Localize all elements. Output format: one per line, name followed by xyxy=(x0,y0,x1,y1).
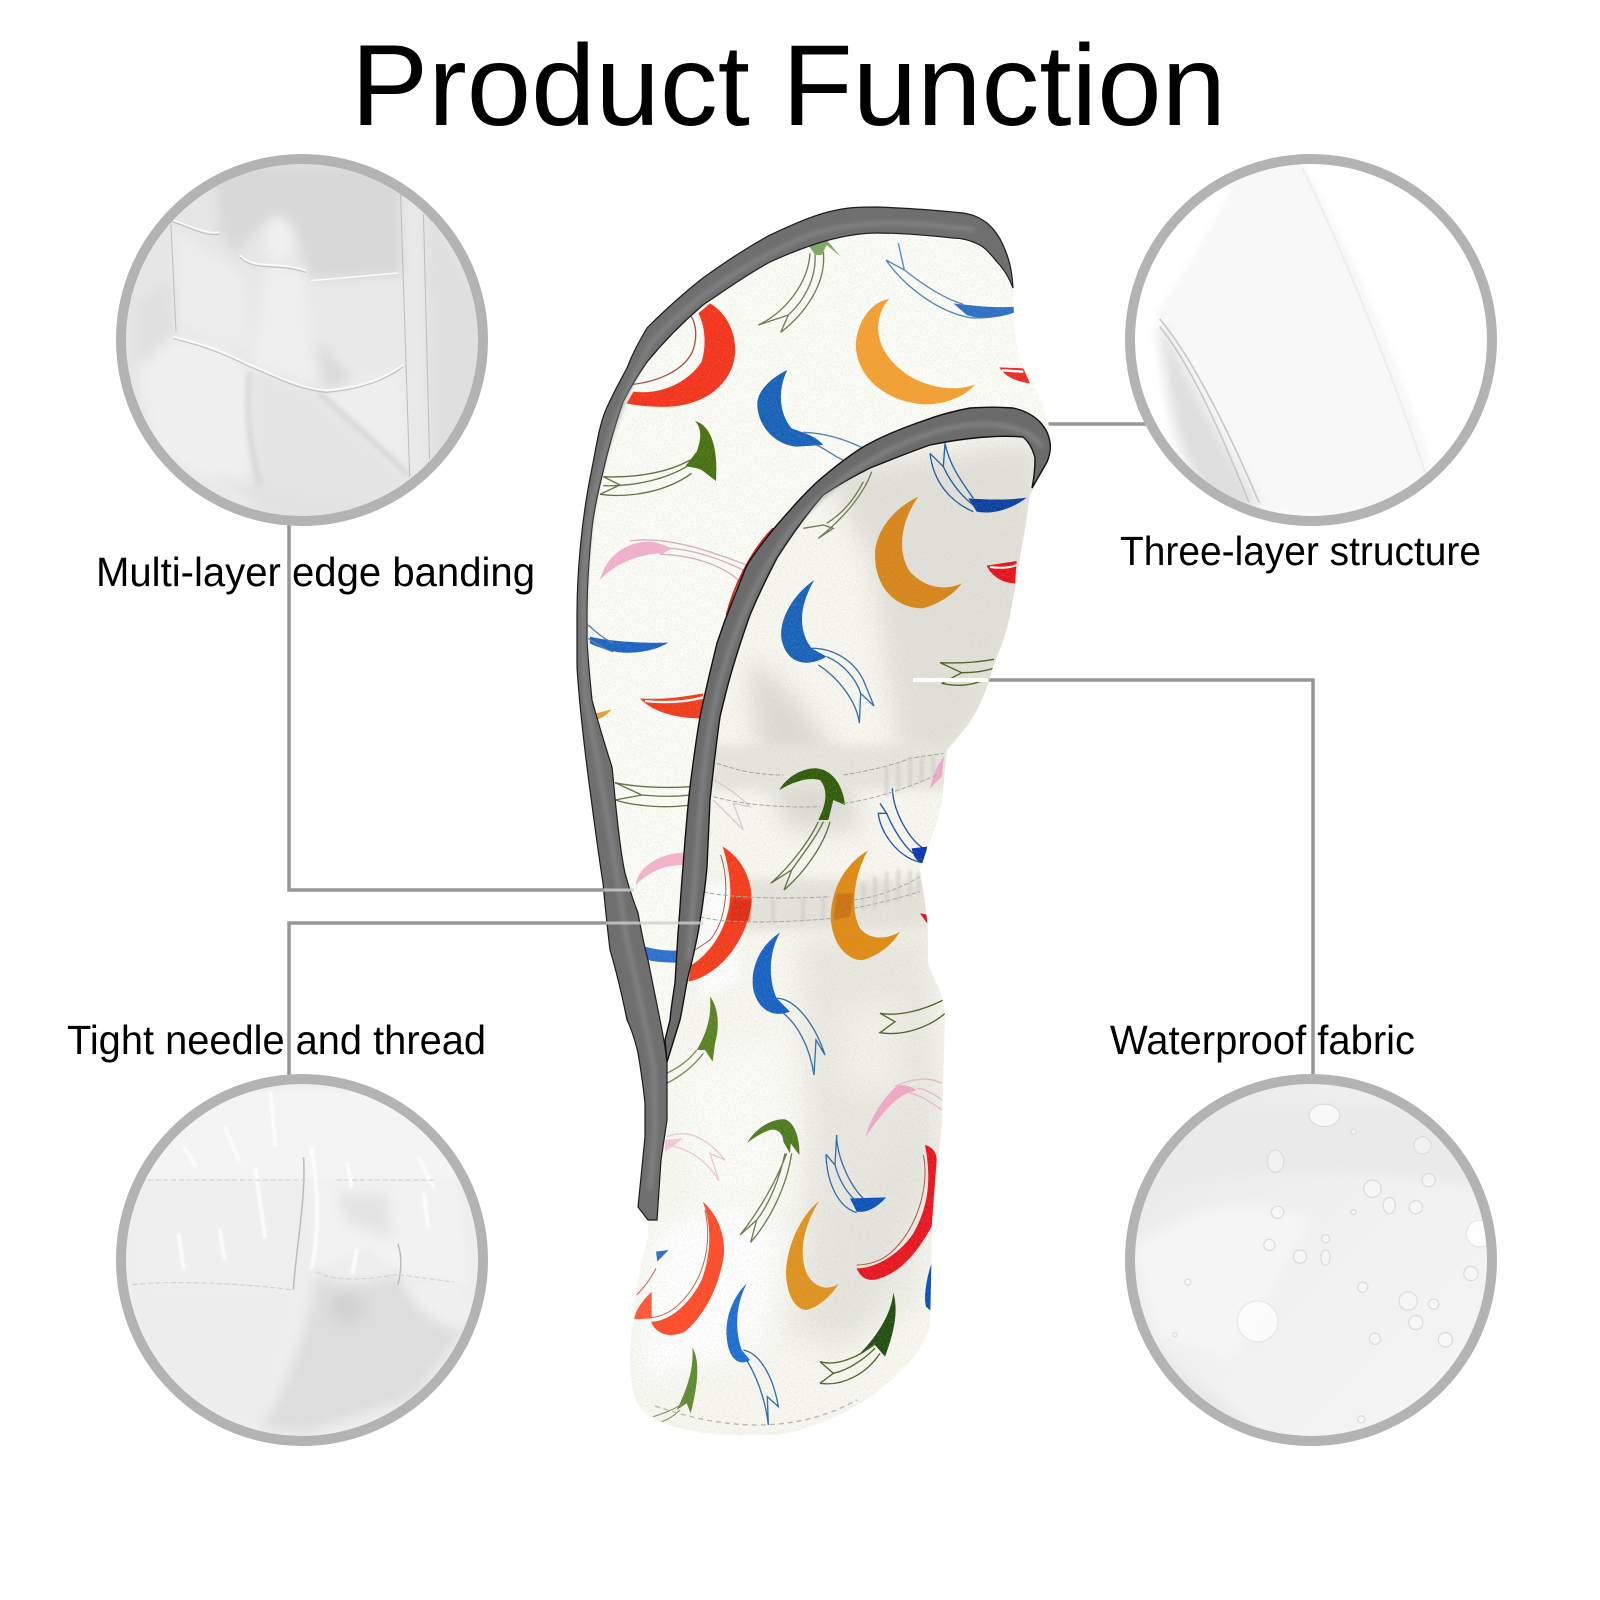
title: Product Function xyxy=(351,22,1226,150)
leather grain xyxy=(570,200,1060,1440)
rear panel print xyxy=(588,240,1030,963)
label: multi-layer edge banding: Multi-layer edge banding xyxy=(96,549,535,595)
circle ring xyxy=(121,1079,483,1441)
front panel base xyxy=(630,407,1050,1435)
rear panel base xyxy=(577,207,1050,1435)
white connector segment xyxy=(913,678,988,682)
water droplets xyxy=(1173,1104,1493,1423)
front binding highlight xyxy=(688,424,1042,960)
rear edge binding xyxy=(577,207,1013,1220)
circle: waterproof fabric detail xyxy=(1125,1075,1497,1447)
connector lines xyxy=(289,424,1313,1075)
product: golf club head cover xyxy=(570,200,1060,1440)
faint connector continuation xyxy=(603,890,703,923)
circle: multi-layer edge banding detail xyxy=(116,154,488,526)
circle ring xyxy=(1130,159,1492,521)
circle: tight needle and thread detail xyxy=(116,1074,488,1446)
rear binding highlight xyxy=(584,223,975,1190)
circle ring xyxy=(121,159,483,521)
front panel shading xyxy=(640,440,1040,1380)
circle: three-layer structure detail xyxy=(1130,159,1492,526)
label: waterproof fabric: Waterproof fabric xyxy=(1110,1017,1415,1063)
front panel print xyxy=(634,443,1027,1425)
label: tight needle and thread: Tight needle and thread xyxy=(67,1017,486,1063)
label: three-layer structure: Three-layer structure xyxy=(1120,528,1481,574)
gathered stitching xyxy=(700,753,943,922)
front edge binding xyxy=(665,407,1050,1062)
gather wrinkles xyxy=(773,755,933,923)
circle ring xyxy=(1130,1079,1492,1441)
